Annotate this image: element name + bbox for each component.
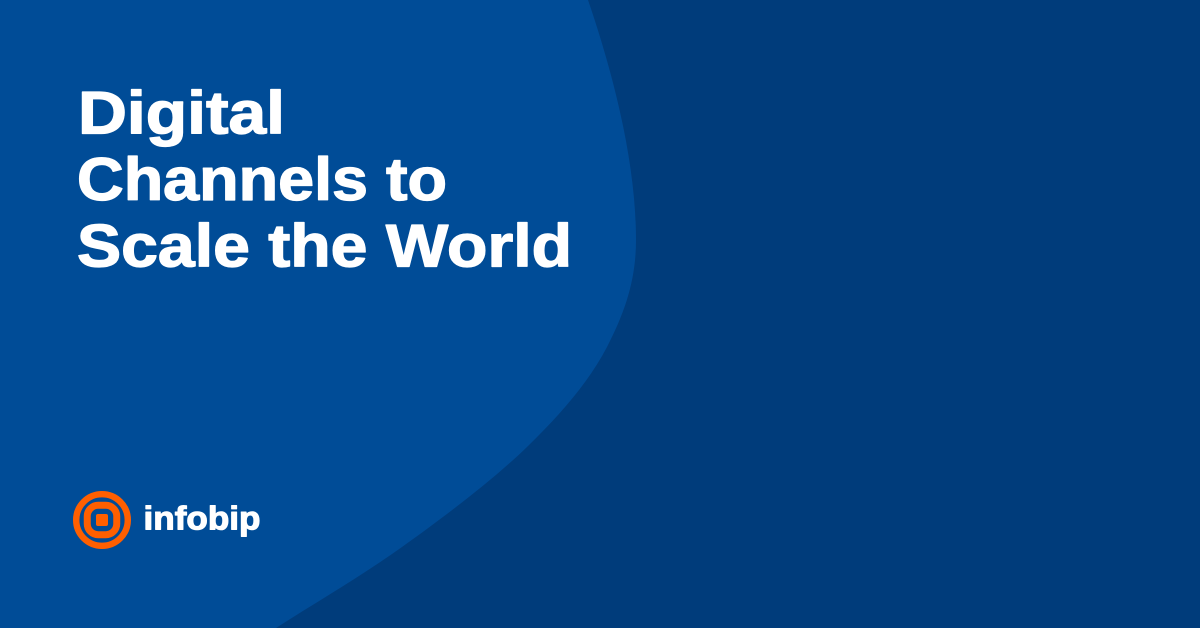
title: Channels to	[77, 146, 447, 213]
logo	[76, 494, 260, 546]
icon: infobip concentric rings	[76, 494, 128, 546]
title	[77, 80, 572, 280]
title: Scale the World	[77, 212, 572, 280]
title: Digital	[78, 80, 285, 146]
wordmark: infobip	[144, 500, 260, 536]
curved lighter panel	[0, 0, 636, 628]
